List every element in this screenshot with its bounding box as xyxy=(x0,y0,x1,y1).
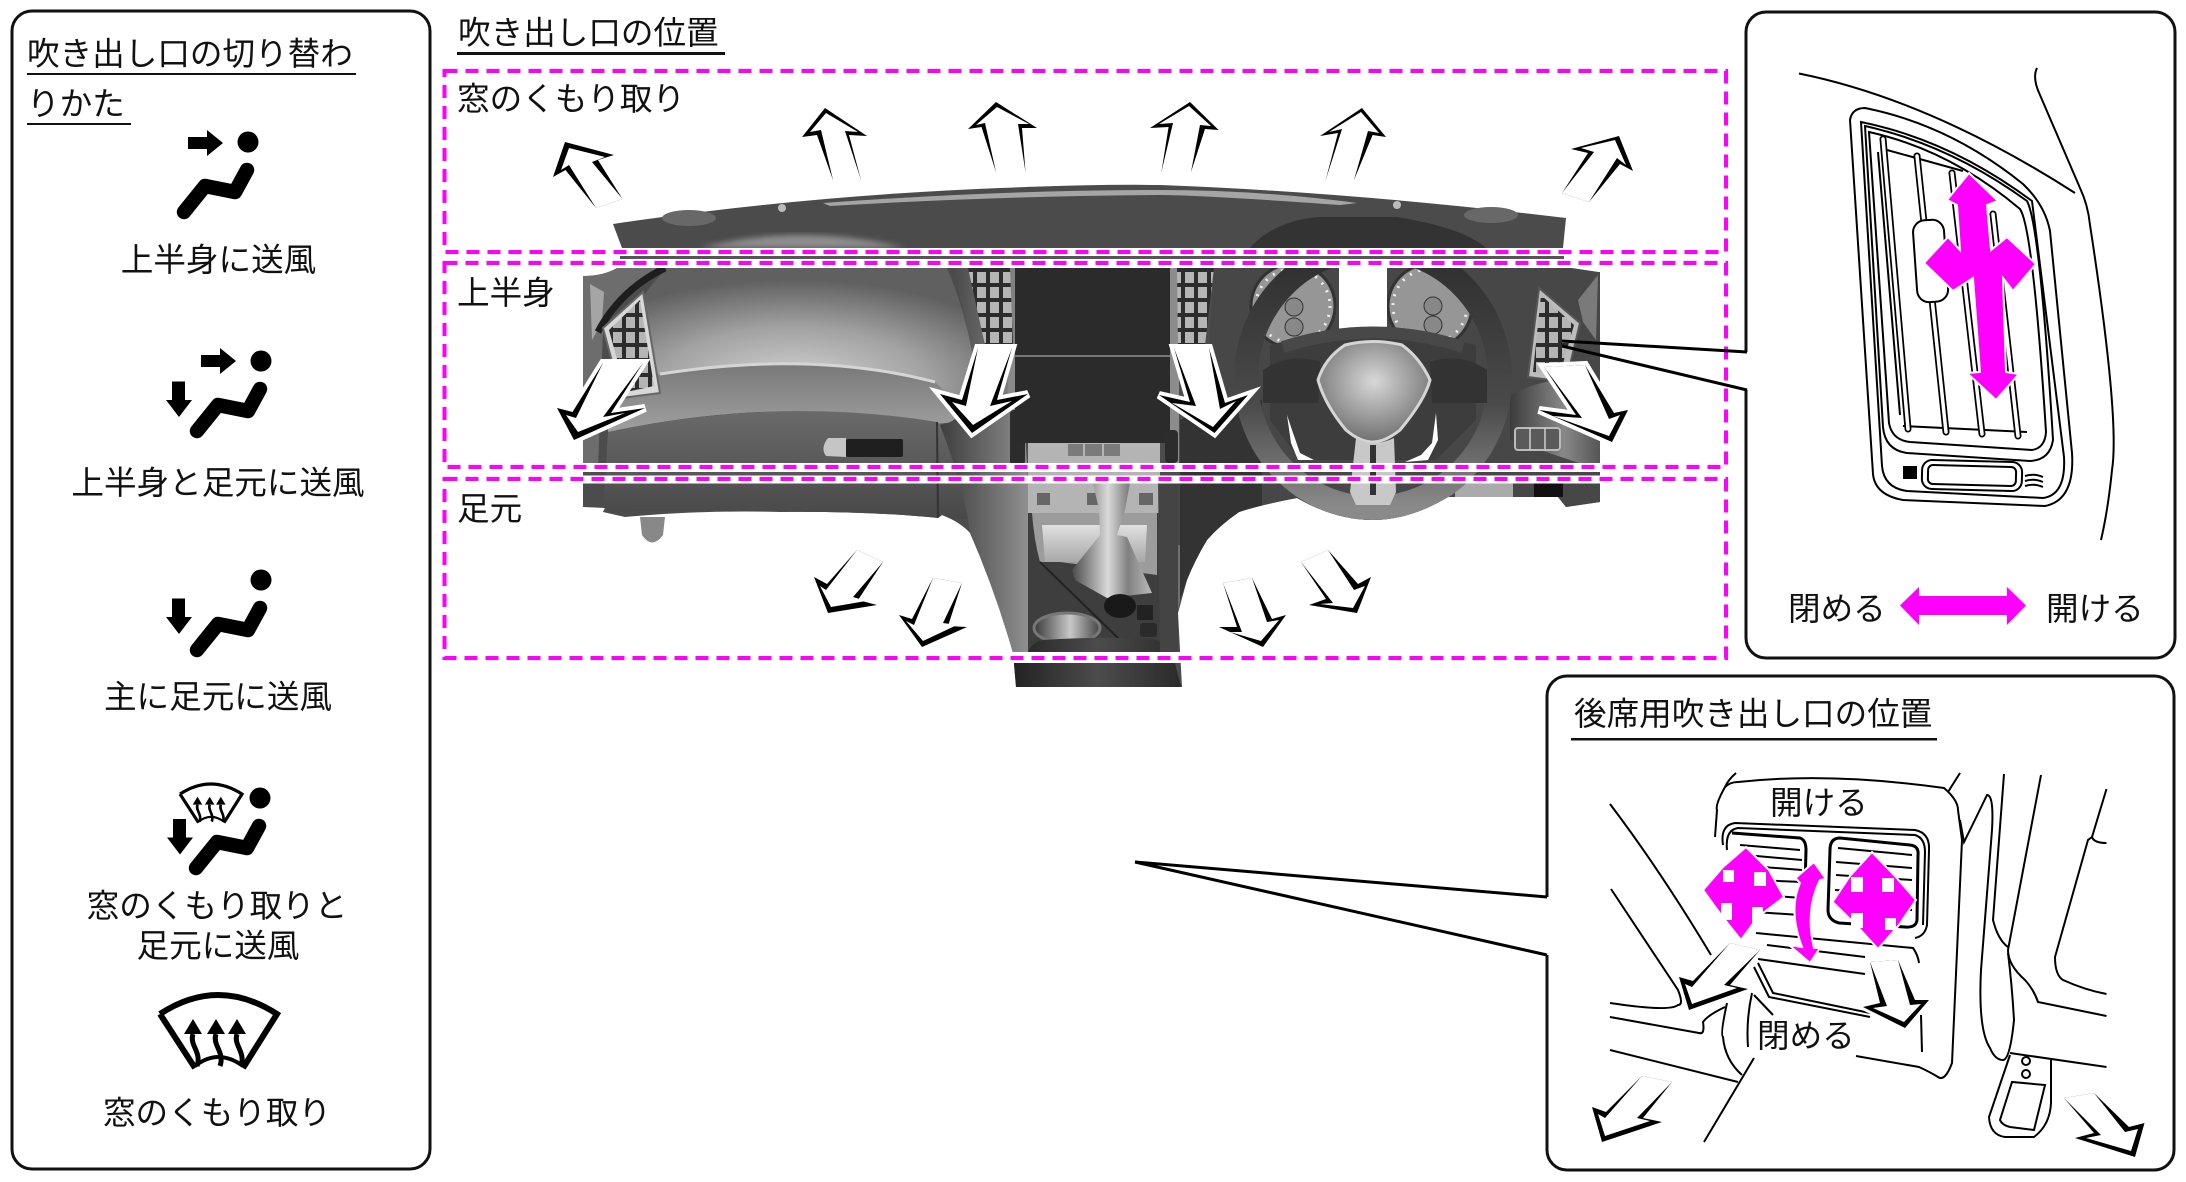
dashboard body xyxy=(583,268,1600,687)
arrows: upper body airflow xyxy=(557,348,1628,442)
right vent xyxy=(1528,288,1580,382)
cup holder xyxy=(1034,613,1100,643)
console right side xyxy=(1178,512,1240,610)
magenta cross: left rear vent xyxy=(1703,847,1784,940)
callout lines to rear vent xyxy=(1135,862,1547,955)
magenta direction cross xyxy=(1924,173,2036,400)
label: upper body: 上半身 xyxy=(457,274,555,311)
label: close: 閉める xyxy=(1788,590,1886,627)
heading: how to switch vents xyxy=(27,35,356,125)
label: open: 開ける xyxy=(1770,784,1868,821)
dashed zone: upper body xyxy=(444,263,1726,467)
mode: mainly feet xyxy=(104,570,332,715)
open close arrow xyxy=(1900,587,2026,625)
mode: mainly feet: 主に足元に送風 xyxy=(104,678,332,715)
dashboard top xyxy=(613,185,1566,248)
lower spoke xyxy=(1350,438,1396,505)
selector knob and switches xyxy=(1104,594,1136,618)
label: feet: 足元 xyxy=(457,490,522,527)
panel: rear vent position xyxy=(1135,676,2174,1170)
mode: upper body and feet xyxy=(71,348,365,501)
glove box xyxy=(603,411,985,520)
arrows: foot airflow xyxy=(814,550,1371,647)
heading: vent positions: 吹き出し口の位置 xyxy=(458,14,719,51)
lower console xyxy=(1028,513,1160,660)
label: open: 開ける xyxy=(2046,590,2144,627)
center screen xyxy=(1015,268,1170,443)
passenger dash xyxy=(602,268,985,432)
panel: how to switch vents xyxy=(12,11,430,1169)
airbag hub xyxy=(1318,342,1430,442)
mode: defog and feet xyxy=(87,784,347,964)
label: defog: 窓のくもり取り xyxy=(457,80,685,117)
magenta cross: right rear vent xyxy=(1832,852,1916,949)
gear shifter xyxy=(1072,483,1152,598)
left pillar xyxy=(583,268,660,470)
mode: upper body and feet: 上半身と足元に送風 xyxy=(71,464,365,501)
center stack left xyxy=(940,268,1028,660)
gauges xyxy=(1251,264,1335,348)
steering column area xyxy=(1270,332,1476,460)
heading: rear vent position: 後席用吹き出し口の位置 xyxy=(1574,695,1932,732)
white bands behind dashes xyxy=(560,248,1610,663)
panel: side vent detail xyxy=(1562,12,2175,658)
rear console line drawing xyxy=(1610,773,2106,1142)
mode: defog and feet: 足元に送風 xyxy=(137,927,299,964)
dashboard illustration xyxy=(560,185,1610,690)
driver side panels xyxy=(1178,268,1600,545)
arrows: defog airflow xyxy=(553,102,1633,208)
dial xyxy=(1922,460,2022,491)
steering wheel rim xyxy=(1246,248,1500,508)
mode: defog xyxy=(103,995,331,1131)
left vent xyxy=(603,292,660,398)
heading: how to switch vents: りかた xyxy=(27,85,125,122)
dashed zone: windshield defog xyxy=(444,71,1726,252)
magenta curved arrow: open close xyxy=(1789,862,1826,963)
mode: defog: 窓のくもり取り xyxy=(103,1094,331,1131)
mode: defog and feet: 窓のくもり取りと xyxy=(87,887,347,924)
dashed zone: feet xyxy=(444,479,1726,658)
vent tab xyxy=(1912,219,1949,303)
rear airflow arrows xyxy=(1592,943,2144,1157)
mode: upper body xyxy=(121,130,316,278)
vent slats xyxy=(1883,139,2018,436)
heading: how to switch vents: 吹き出し口の切り替わ xyxy=(27,35,353,72)
wheel spokes xyxy=(1263,358,1320,403)
armrest xyxy=(1013,638,1182,690)
knob xyxy=(640,517,665,542)
label: close: 閉める xyxy=(1757,1017,1855,1054)
climate panel xyxy=(1028,443,1160,515)
mode: upper body: 上半身に送風 xyxy=(121,241,316,278)
side vent line drawing xyxy=(1799,68,2114,540)
callout lines to side vent xyxy=(1562,341,1747,390)
